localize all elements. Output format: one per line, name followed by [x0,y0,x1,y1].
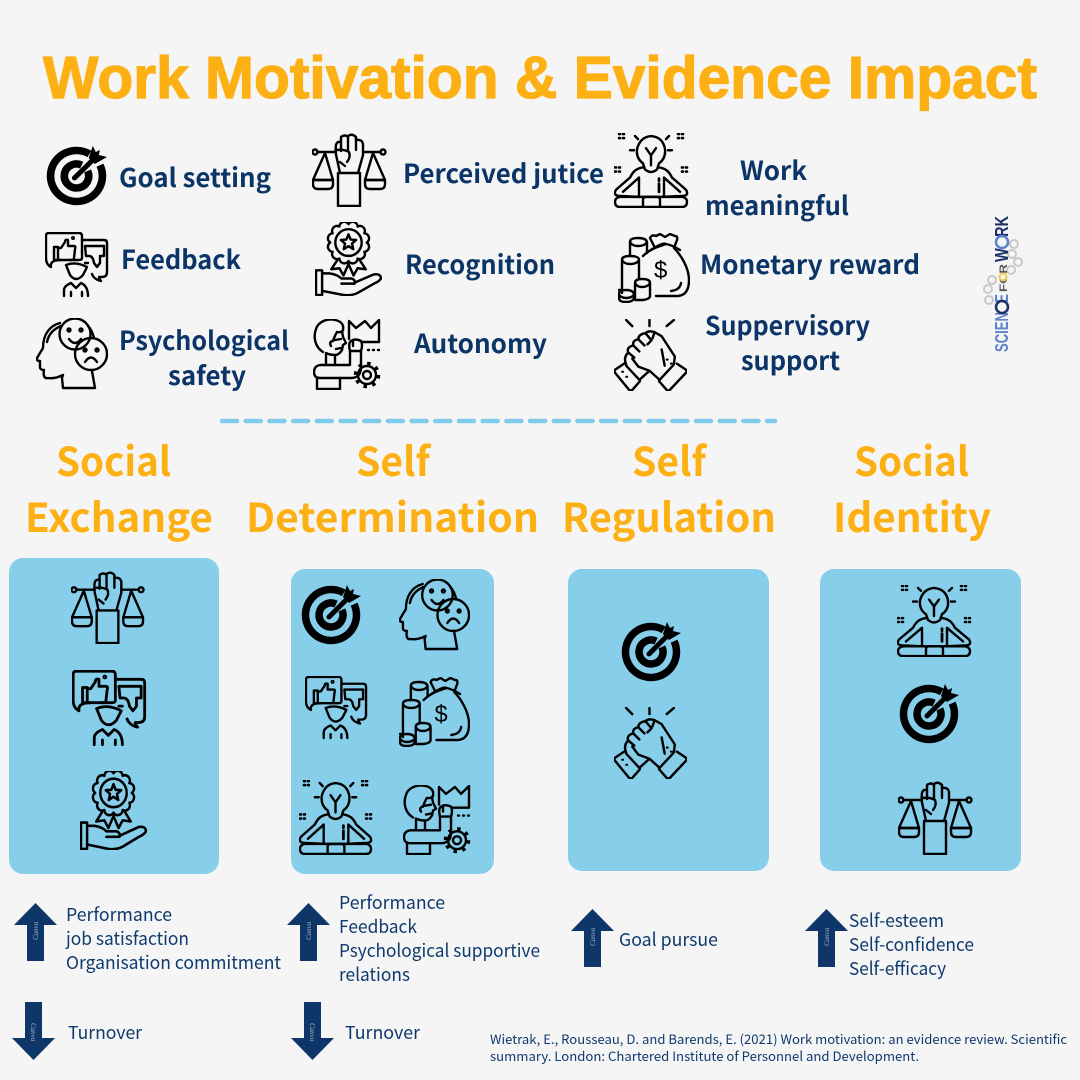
icon: target [903,684,959,739]
icon: feedback [46,233,107,296]
arrow up [805,909,848,967]
heading: self regulation: Regulation [562,486,776,544]
heading: self regulation: Self [632,430,708,488]
label: supervisory support: Suppervisory [705,306,870,343]
increased outcomes: job satisfaction [65,925,189,951]
heading: social exchange: Social [56,430,171,488]
label: psychological safety: safety [168,356,246,393]
increased outcomes: Organisation commitment [66,949,281,975]
label: work meaningful: Work [740,151,807,188]
heading: self regulation [562,430,776,544]
logo: science for work: FOR [998,264,1010,292]
increased outcomes: Feedback [339,913,417,939]
label: monetary reward: Monetary reward [700,245,920,282]
decreased outcome: Turnover [345,1019,421,1045]
icon: target [625,622,681,677]
label: psychological safety: Psychological [119,321,289,358]
label: perceived justice: Perceived jutice [403,154,604,191]
arrow down [12,1002,55,1060]
icon: supervisory support [615,320,686,390]
arrow up [287,903,330,961]
increased outcomes: Self-esteem [849,907,944,933]
heading: self determination [246,430,539,544]
increased outcomes: relations [339,961,410,987]
increased outcomes [65,901,281,975]
label: goal setting: Goal setting [119,158,271,195]
logo: science for work [984,216,1022,352]
icon: autonomy [404,785,469,854]
motivator legend [37,134,920,393]
label: recognition: Recognition [405,245,555,282]
label: work meaningful [705,151,849,223]
increased outcome: Goal pursue [619,926,718,952]
label: supervisory support [705,306,870,378]
divider [222,419,775,423]
decreased outcome: Turnover [68,1019,143,1045]
increased outcomes [339,889,540,987]
icon: work meaningful [300,781,371,854]
icon: supervisory support [615,708,686,778]
icon: psychological safety [37,318,107,388]
title: Work Motivation & Evidence Impact [43,45,1037,111]
icon: goal setting target [51,146,107,201]
increased outcomes: Self-confidence [849,931,974,957]
panel: self determination [291,569,494,874]
heading: social identity [833,430,991,544]
icon: justice [71,573,144,643]
outcomes: social identity [805,907,974,981]
label: feedback: Feedback [121,240,241,277]
icon: work meaningful [898,586,970,656]
label: autonomy: Autonomy [413,324,547,361]
icon: autonomy [314,319,379,389]
outcomes: self determination [287,889,540,1060]
icon: recognition [81,771,146,849]
arrow up [571,909,614,967]
heading: social identity: Social [854,430,969,488]
label: supervisory support: support [741,341,840,378]
citation [490,1029,1067,1065]
icon: justice [898,783,972,854]
panel: social identity [820,569,1021,871]
increased outcomes [849,907,974,981]
increased outcomes: Self-efficacy [849,955,947,981]
increased outcomes: Performance [339,889,445,915]
heading: self determination: Determination [246,486,539,544]
icon: psychological safety [400,580,469,649]
icon: work meaningful [615,134,687,207]
citation: summary. London: Chartered Institute of Personnel and Development. [490,1046,919,1065]
panel: social exchange [9,558,219,874]
citation: Wietrak, E., Rousseau, D. and Barends, E. (2021) Work motivation: an evidence review. Scientific [490,1029,1067,1048]
icon: feedback [73,671,145,745]
logo: science for work: SCIENCE [992,294,1012,352]
heading: self determination: Self [356,430,432,488]
arrow up [14,903,57,961]
heading: social exchange [25,430,213,544]
label: work meaningful: meaningful [705,186,849,223]
icon: feedback [306,677,366,738]
increased outcomes: Performance [66,901,172,927]
outcomes: social exchange [12,901,281,1060]
icon: target [305,585,361,640]
heading: social exchange: Exchange [25,486,213,544]
increased outcomes: Psychological supportive [339,937,540,963]
icon: perceived justice [312,135,386,206]
icon: recognition [316,222,381,295]
arrow down [291,1002,334,1060]
outcomes: self regulation [571,909,718,967]
icon: money [400,678,469,746]
heading: social identity: Identity [833,486,991,544]
logo: science for work: WORK [992,216,1012,262]
label: psychological safety [119,321,289,393]
panel: self regulation [568,569,769,871]
icon: monetary reward [619,234,689,302]
